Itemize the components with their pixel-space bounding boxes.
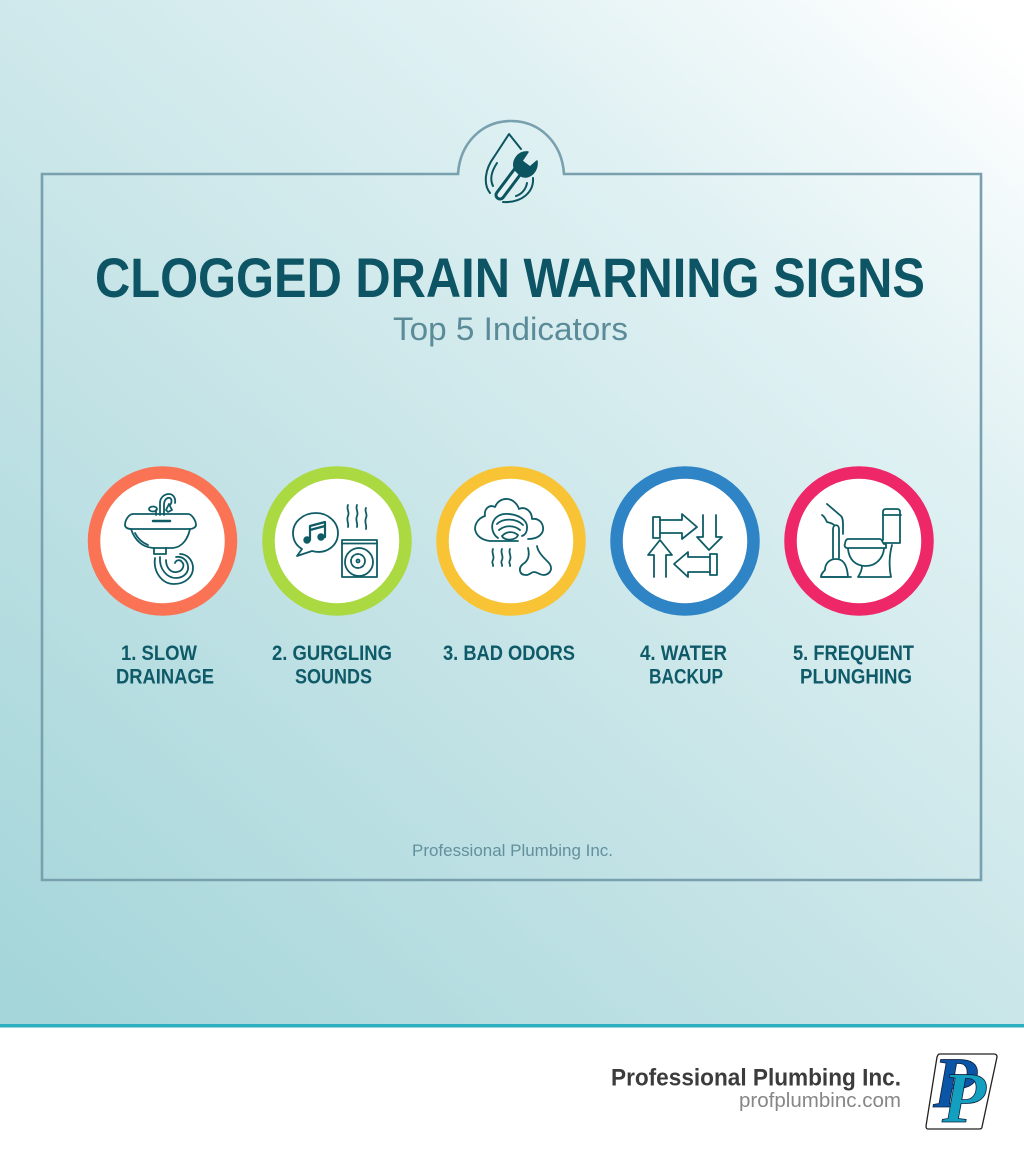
label: 2. GURGLING bbox=[272, 642, 392, 665]
frame with top arch bbox=[42, 121, 981, 880]
label: PLUNGHING bbox=[800, 666, 912, 688]
label: 1. SLOW bbox=[121, 642, 197, 665]
icon: speech bubble and drain bbox=[293, 505, 377, 577]
label: 4. WATER bbox=[640, 642, 727, 665]
label: 5. FREQUENT bbox=[793, 642, 914, 665]
logo: PP badge bbox=[926, 1043, 997, 1138]
footer company name: Professional Plumbing Inc. bbox=[611, 1064, 901, 1092]
label bbox=[272, 642, 392, 688]
icon: four pipe arrows bbox=[648, 514, 722, 577]
ring: green bbox=[268, 472, 406, 610]
logo: PP badge: P bbox=[941, 1058, 987, 1138]
footer website: profplumbinc.com bbox=[739, 1090, 901, 1112]
indicator 1: slow drainage bbox=[94, 472, 231, 688]
footer: white band with teal rule bbox=[0, 1024, 1024, 1154]
ring: pink bbox=[790, 472, 928, 610]
label bbox=[793, 642, 914, 688]
subtitle: Top 5 Indicators bbox=[393, 311, 628, 347]
icon: cloud, waves and nose bbox=[475, 499, 551, 575]
indicator 3: bad odors bbox=[442, 472, 580, 665]
title: CLOGGED DRAIN WARNING SIGNS bbox=[95, 246, 925, 309]
ring: coral bbox=[94, 472, 231, 610]
logo: PP badge: P bbox=[932, 1043, 978, 1123]
label: SOUNDS bbox=[295, 666, 372, 688]
label bbox=[640, 642, 727, 688]
ring: yellow bbox=[442, 472, 580, 610]
label: DRAINAGE bbox=[116, 666, 214, 688]
label bbox=[116, 642, 214, 688]
label: 3. BAD ODORS bbox=[443, 642, 575, 665]
icon: plunger and toilet bbox=[821, 504, 901, 577]
indicator 2: gurgling sounds bbox=[268, 472, 406, 688]
icon: water drop with wrench bbox=[486, 134, 537, 202]
ring: blue bbox=[616, 472, 754, 610]
indicator 4: water backup bbox=[616, 472, 754, 688]
frame caption: Professional Plumbing Inc. bbox=[412, 842, 613, 860]
label: BACKUP bbox=[649, 666, 723, 688]
indicator 5: frequent plunging bbox=[790, 472, 928, 688]
icon: sink with swirl bbox=[125, 494, 196, 584]
